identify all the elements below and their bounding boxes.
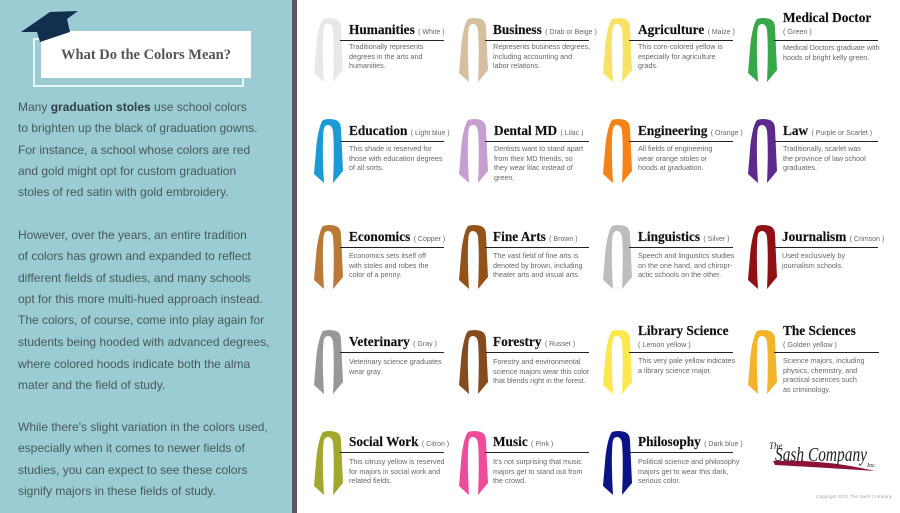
- entry: Journalism: Used exclusively by: [782, 251, 845, 260]
- entry: Social Work: for majors in social work and: [349, 467, 440, 476]
- entry: Dental MD: Dentists want to stand apart: [494, 144, 583, 153]
- intro paragraph 2: students being hooded with advanced degrees,: [18, 335, 270, 349]
- entry: Dental MD: [485, 123, 589, 182]
- entry: Business: [485, 22, 597, 70]
- entry: Fine Arts: theater arts and visual arts.: [493, 270, 580, 279]
- entry: Engineering: Engineering ( Orange ): [638, 123, 743, 138]
- icon: citron stole: [314, 431, 343, 495]
- entry: Engineering: hoods at graduation.: [638, 163, 704, 172]
- entry: Linguistics: actic schools on the other.: [638, 270, 721, 279]
- icon: copper stole: [314, 225, 343, 289]
- entry: Library Science: Library Science: [638, 323, 728, 338]
- entry: The Sciences: practical sciences such: [783, 375, 857, 384]
- intro paragraph 3: While there's slight variation in the colors used,: [18, 420, 268, 434]
- intro paragraph 3: signify majors in these fields of study.: [18, 484, 216, 498]
- entry: Medical Doctor: Medical Doctors graduate with: [783, 43, 880, 52]
- entry: Agriculture: Agriculture ( Maize ): [638, 22, 735, 37]
- entry: Forestry: that blends right in the forest.: [493, 376, 586, 385]
- title box: What Do the Colors Mean?: [61, 47, 231, 63]
- entry: Engineering: wear orange stoles or: [638, 154, 707, 163]
- entry: Humanities: Traditionally represents: [349, 42, 423, 51]
- logo: The Sash Company: The: [769, 441, 783, 451]
- entry: Music: It's not surprising that music: [493, 457, 582, 466]
- title outline frame: [33, 38, 244, 87]
- entry: Education: [340, 123, 450, 172]
- entry: Law: graduates.: [783, 163, 817, 172]
- entry: Philosophy: Political science and philosophy: [638, 457, 740, 466]
- title box: [41, 31, 251, 78]
- entry: Journalism: Journalism ( Crimson ): [782, 229, 884, 244]
- icon: graduation cap: [21, 11, 78, 42]
- entry: Education: This shade is reserved for: [349, 144, 432, 153]
- entry: Fine Arts: Fine Arts ( Brown ): [493, 229, 578, 244]
- icon: gray stole: [314, 330, 343, 394]
- entry: Journalism: journalism schools.: [782, 261, 843, 270]
- entry: Forestry: Forestry and environmental: [493, 357, 580, 366]
- intro paragraph 2: where colored hoods indicate both the alma: [18, 357, 250, 371]
- intro paragraph 2: [18, 228, 270, 392]
- intro paragraph 3: especially when it comes to newer fields of: [18, 441, 245, 455]
- entry: Library Science: a library science major.: [638, 366, 712, 375]
- entry: Economics: Economics ( Copper ): [349, 229, 445, 244]
- entry: Economics: [340, 229, 445, 279]
- intro paragraph 2: of colors has grown and expanded to reflect: [18, 249, 251, 263]
- entry: Economics: Economics sets itself off: [349, 251, 426, 260]
- icon: golden yellow stole: [748, 330, 777, 394]
- entry: Law: the province of law school: [783, 154, 866, 163]
- entry: Veterinary: wear gray.: [349, 367, 382, 376]
- intro paragraph 1: and gold might opt for custom graduation: [18, 164, 236, 178]
- entry: Medical Doctor: ( Green ): [783, 27, 812, 36]
- entry: The Sciences: The Sciences: [783, 323, 856, 338]
- entry: Social Work: Social Work ( Citron ): [349, 434, 449, 449]
- logo: The Sash Company: [769, 441, 876, 471]
- entry: Social Work: related fields.: [349, 476, 392, 485]
- entry: The Sciences: as criminology.: [783, 385, 830, 394]
- entry: Law: Traditionally, scarlet was: [783, 144, 861, 153]
- entry: The Sciences: Science majors, including: [783, 356, 864, 365]
- icon: crimson stole: [748, 225, 777, 289]
- entry: Education: Education ( Light blue ): [349, 123, 450, 138]
- entry: Dental MD: Dental MD ( Lilac ): [494, 123, 583, 138]
- entry: Agriculture: grads.: [638, 61, 658, 70]
- entry: Education: those with education degrees: [349, 154, 443, 163]
- entry: Music: [485, 434, 589, 485]
- icon: lilac stole: [459, 119, 488, 183]
- icon: lemon yellow stole: [603, 330, 632, 394]
- intro paragraph 2: However, over the years, an entire tradition: [18, 228, 247, 242]
- entry: Business: including accounting and: [493, 52, 572, 61]
- icon: pink stole: [459, 431, 488, 495]
- entry: Engineering: All fields of engineering: [638, 144, 712, 153]
- entry: Library Science: This very pale yellow indicates: [638, 356, 735, 365]
- intro paragraph 1: Many graduation stoles use school colors: [18, 100, 247, 114]
- intro paragraph 3: studies, you can expect to see these colors: [18, 463, 247, 477]
- entry: Dental MD: from their MD friends, so: [494, 154, 573, 163]
- entry: Veterinary: [340, 334, 444, 376]
- entry: Social Work: [340, 434, 449, 485]
- entry: Forestry: [485, 334, 590, 385]
- entry: Linguistics: Linguistics ( Silver ): [638, 229, 729, 244]
- icon: dark blue stole: [603, 431, 632, 495]
- entry: Fine Arts: [485, 229, 589, 279]
- entry: Philosophy: majors get to wear this dark,: [638, 467, 728, 476]
- copyright: Copyright 2021 The Sash Company: [816, 495, 892, 500]
- entry: Law: [774, 123, 878, 172]
- entry: Humanities: degrees in the arts and: [349, 52, 423, 61]
- icon: brown stole: [459, 225, 488, 289]
- entry: The Sciences: ( Golden yellow ): [783, 340, 837, 349]
- entry: Music: Music ( Pink ): [493, 434, 553, 449]
- entry: Business: labor relations.: [493, 61, 540, 70]
- entry: Library Science: ( Lemon yellow ): [638, 340, 691, 349]
- intro paragraph 1: to brighten up the black of graduation gowns.: [18, 121, 258, 135]
- entry: Philosophy: [629, 434, 743, 485]
- entry: Veterinary: Veterinary science graduates: [349, 357, 442, 366]
- entry: Humanities: humanities.: [349, 61, 386, 70]
- entry: Forestry: Forestry ( Russet ): [493, 334, 575, 349]
- entry: Dental MD: green.: [494, 173, 514, 182]
- entry: Philosophy: Philosophy ( Dark blue ): [638, 434, 743, 449]
- entry: The Sciences: [774, 323, 879, 394]
- entry: Library Science: [629, 323, 735, 375]
- entry: Music: majors get to stand out from: [493, 467, 582, 476]
- entry: Engineering: [629, 123, 743, 172]
- entry: Social Work: This citrusy yellow is reserved: [349, 457, 444, 466]
- intro paragraph 2: mater and the field of study.: [18, 378, 165, 392]
- entry: The Sciences: physics, chemistry, and: [783, 366, 857, 375]
- entry: Philosophy: serious color.: [638, 476, 680, 485]
- entry: Dental MD: they wear lilac instead of: [494, 163, 573, 172]
- entry: Medical Doctor: Medical Doctor: [783, 10, 871, 25]
- intro paragraph 3: [18, 420, 268, 498]
- intro paragraph 1: stoles of red satin with gold embroidery.: [18, 185, 229, 199]
- entry: Medical Doctor: [774, 10, 880, 62]
- entry: Journalism: [774, 229, 884, 270]
- icon: silver stole: [603, 225, 632, 289]
- entry: Music: the crowd.: [493, 476, 526, 485]
- entry: Linguistics: Speech and linguistics studies: [638, 251, 734, 260]
- intro paragraph 1: For instance, a school whose colors are red: [18, 143, 250, 157]
- entry: Economics: with stoles and robes the: [349, 261, 429, 270]
- panel divider bar: [292, 0, 297, 513]
- entry: Law: Law ( Purple or Scarlet ): [783, 123, 872, 138]
- intro paragraph 1: [18, 100, 258, 199]
- icon: russet stole: [459, 330, 488, 394]
- entry: Business: Represents business degrees,: [493, 42, 590, 51]
- entry: Economics: color of a penny.: [349, 270, 402, 279]
- icon: purple stole: [748, 119, 777, 183]
- entry: Forestry: science majors wear this color: [493, 367, 589, 376]
- entry: Veterinary: Veterinary ( Gray ): [349, 334, 437, 349]
- logo: The Sash Company: Inc.: [866, 463, 876, 469]
- icon: maize stole: [603, 18, 632, 82]
- icon: orange stole: [603, 119, 632, 183]
- entry: Agriculture: This corn-colored yellow is: [638, 42, 723, 51]
- intro paragraph 2: opt for this more multi-hued approach instead.: [18, 292, 263, 306]
- icon: light blue stole: [314, 119, 343, 183]
- entry: Business: Business ( Drab or Beige ): [493, 22, 597, 37]
- entry: Agriculture: [629, 22, 735, 70]
- entry: Linguistics: on the one hand, and chiropr-: [638, 261, 732, 270]
- entry: Linguistics: [629, 229, 734, 279]
- entry: Humanities: [340, 22, 445, 70]
- intro paragraph 2: different fields of studies, and many schools: [18, 271, 251, 285]
- left panel: [0, 0, 297, 513]
- icon: beige stole: [459, 18, 488, 82]
- entry: Education: of all sorts.: [349, 163, 384, 172]
- intro paragraph 2: The colors, of course, come into play again for: [18, 313, 264, 327]
- entry: Medical Doctor: hoods of bright kelly green.: [783, 53, 869, 62]
- icon: white stole: [314, 18, 343, 82]
- entry: Humanities: Humanities ( White ): [349, 22, 445, 37]
- entry: Fine Arts: The vast field of fine arts is: [493, 251, 578, 260]
- entry: Agriculture: especially for agriculture: [638, 52, 716, 61]
- entry: Fine Arts: denoted by brown, including: [493, 261, 583, 270]
- icon: green stole: [748, 18, 777, 82]
